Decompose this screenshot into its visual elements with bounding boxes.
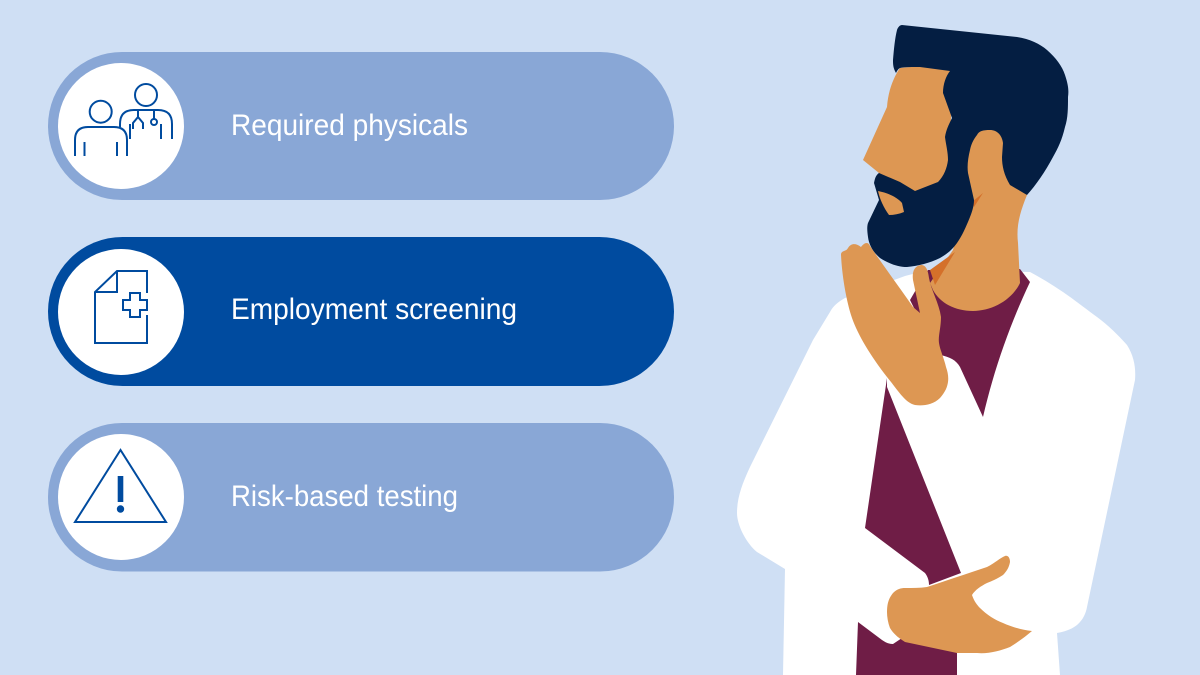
label: risk-based testing: Risk-based testing — [231, 480, 458, 513]
mouth — [878, 191, 904, 215]
label: required physicals: Required physicals — [231, 109, 468, 142]
icon: warning triangle — [75, 450, 166, 522]
raised hand — [841, 243, 948, 405]
shirt lower — [865, 378, 961, 585]
panel: employment screening — [48, 237, 674, 386]
panel: required physicals — [48, 52, 674, 200]
panel: risk-based testing — [48, 423, 674, 572]
face — [863, 66, 952, 205]
illustration: thinking doctor — [737, 25, 1135, 675]
icon: medical document — [95, 271, 147, 343]
neck and ear — [930, 125, 1027, 311]
icon: patient and doctor — [75, 84, 172, 156]
white coat — [737, 270, 1135, 675]
shirt bottom — [856, 622, 957, 675]
lower hand — [887, 556, 1032, 653]
hair and beard — [867, 25, 1068, 267]
label: employment screening: Employment screening — [231, 293, 517, 326]
shirt upper — [910, 269, 1030, 417]
neck shadow — [930, 193, 983, 285]
